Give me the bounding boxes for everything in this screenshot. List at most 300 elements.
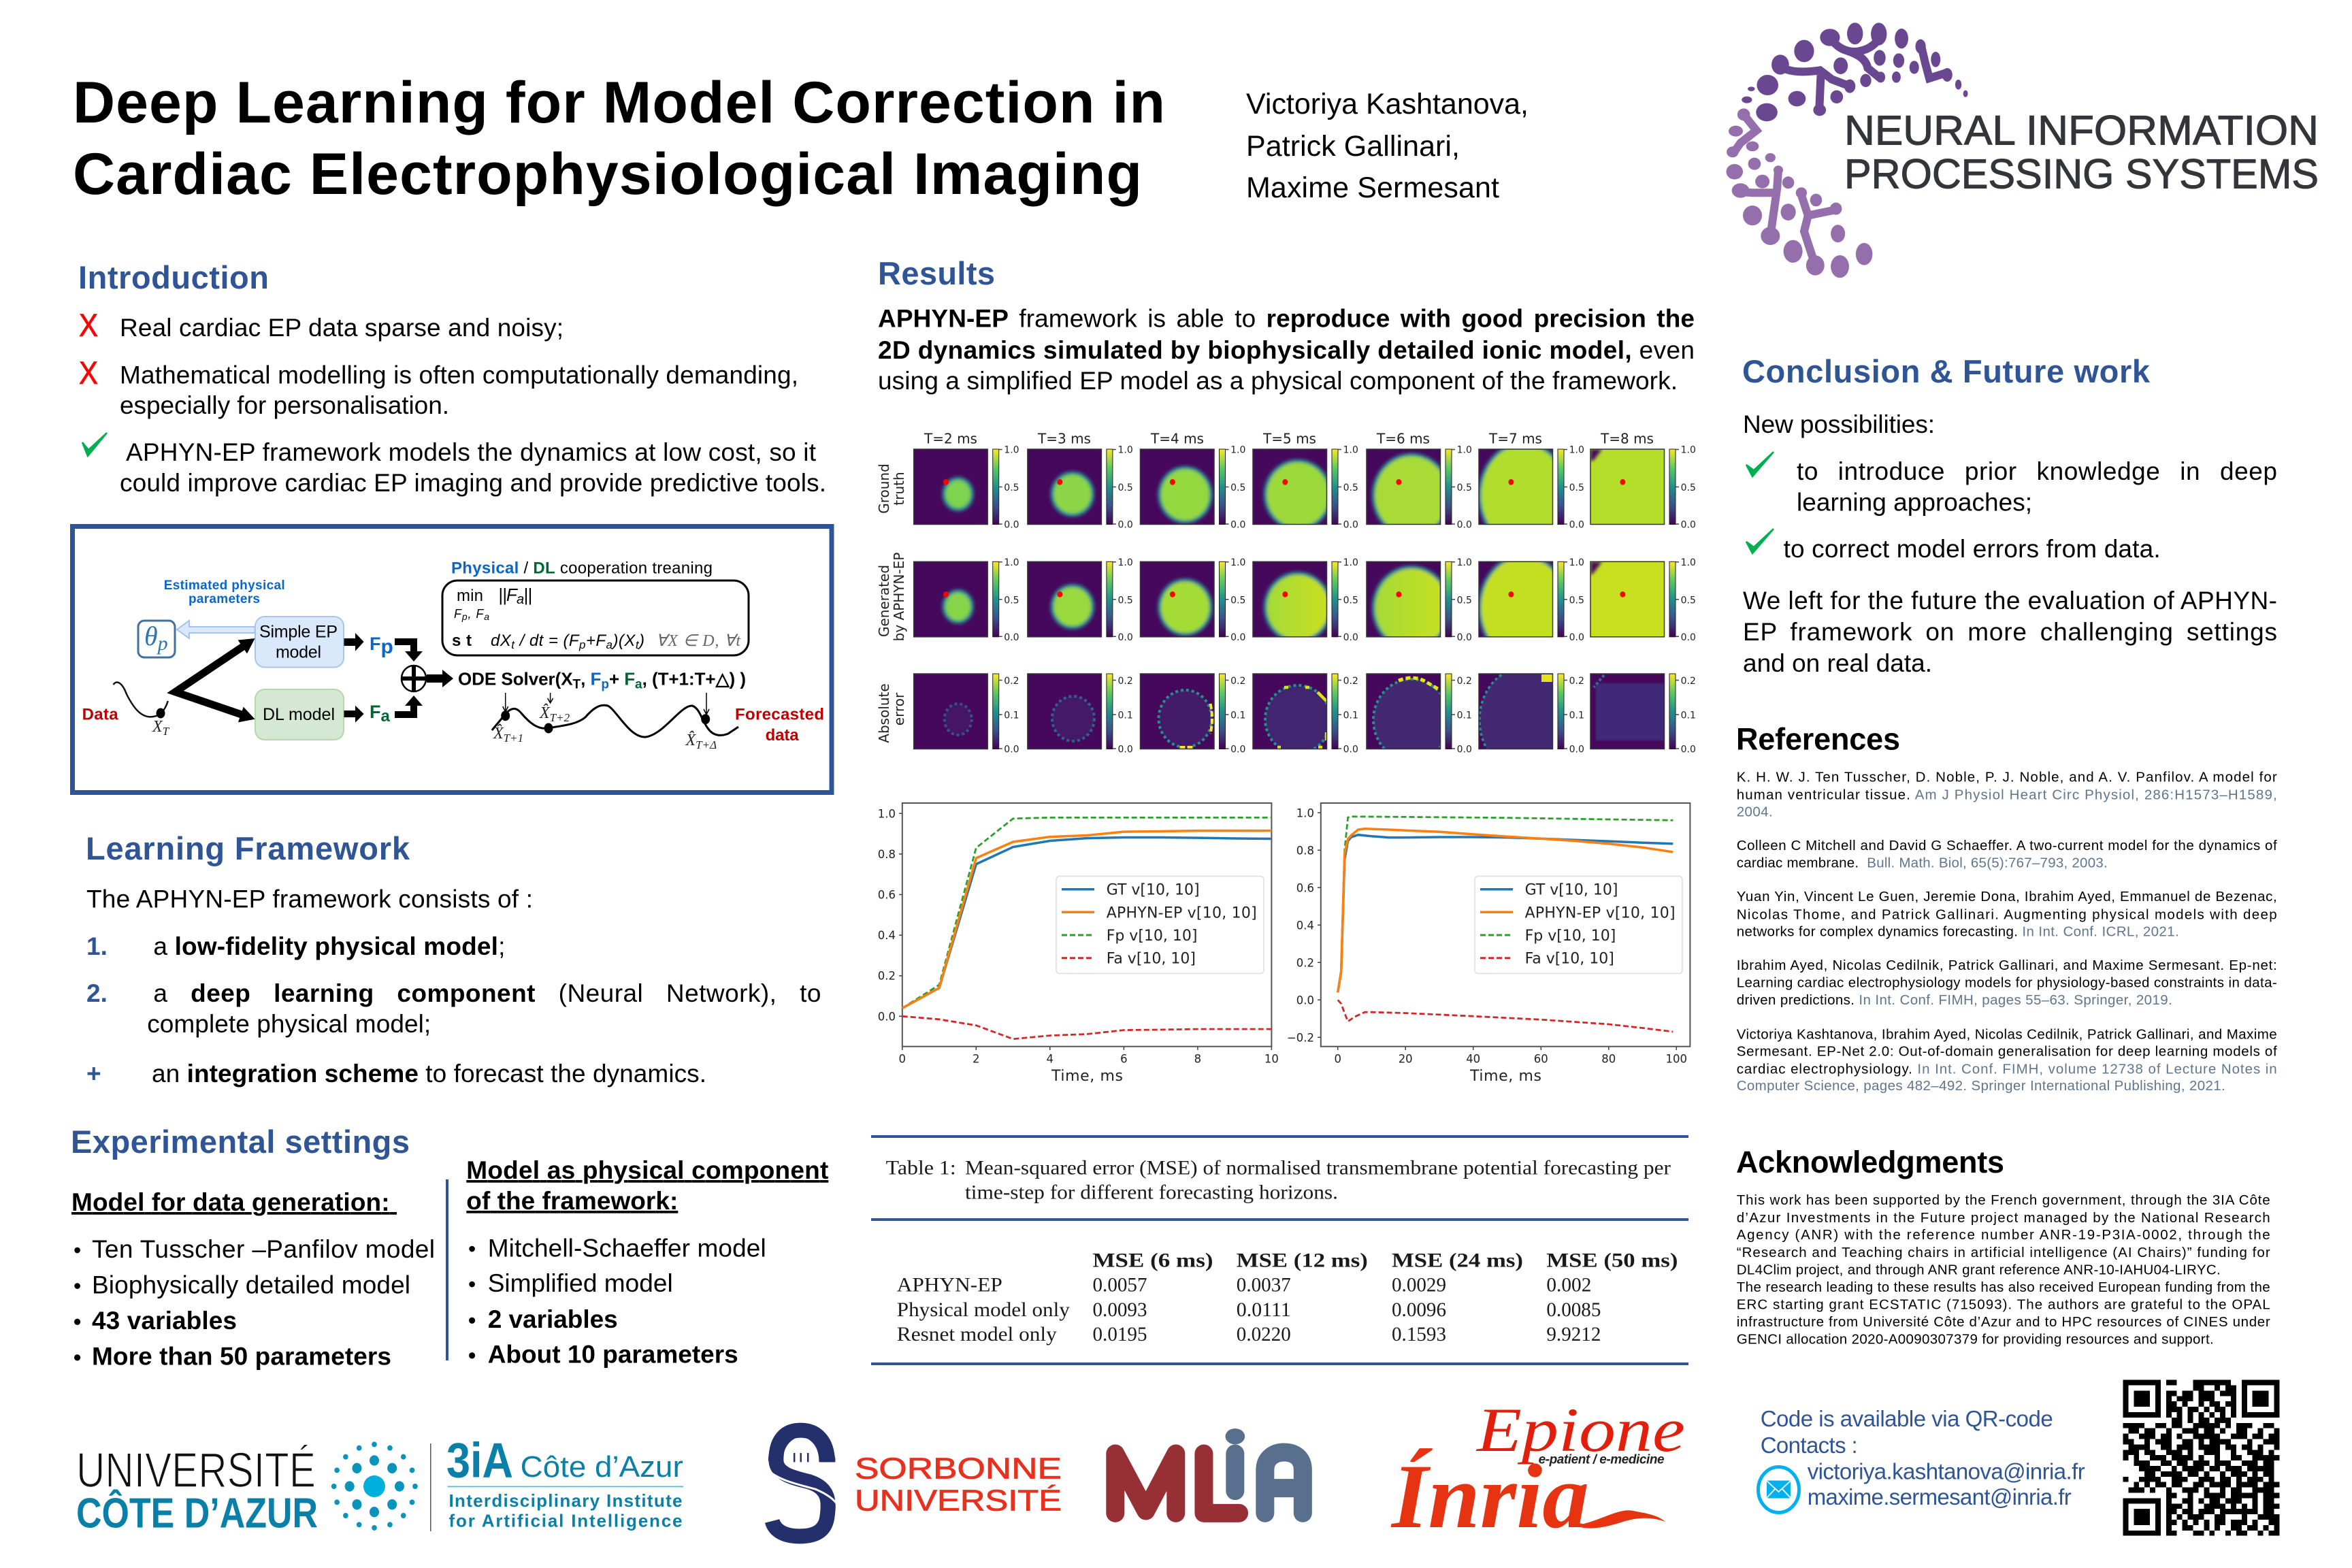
box: simple EP model: Simple EP (259, 623, 338, 642)
axis labels: 8 (1194, 1053, 1201, 1066)
axis labels: 60 (1534, 1053, 1548, 1066)
box: optimisation problem: p (461, 611, 468, 622)
text: results summary: using a simplified EP model as a physical component of the framework. (878, 367, 1678, 395)
logo: 3IA: Côte d’Azur (521, 1450, 683, 1484)
text: future evaluation (1743, 587, 2277, 677)
column titles: T=5 ms (1262, 431, 1316, 447)
axis labels: 4 (1047, 1053, 1054, 1066)
text: results summary: APHYN-EP framework is able to reproduce with good precision the (878, 305, 1695, 332)
column: data generation model: 43 variables (92, 1307, 237, 1335)
chart: data curve: T (163, 725, 170, 738)
heatmap row: absolute error: 0.1 (1004, 710, 1019, 721)
reference 5 (1737, 1026, 2277, 1094)
tagline: e-patient / e-medicine (1539, 1453, 1665, 1467)
heatmap row: generated: 1.0 (1118, 557, 1133, 568)
heatmap row: absolute error: 0.1 (1343, 710, 1358, 721)
heading: conclusion: Conclusion & Future work (1742, 353, 2151, 389)
chart: forecast curve: T+Δ (696, 738, 717, 751)
title (73, 70, 1165, 207)
text: APHYN-EP summary: APHYN-EP framework models the dynamics at low cost, so it (126, 438, 817, 466)
heatmap row: generated: 1.0 (1004, 557, 1019, 568)
heatmap row: absolute error: 0.0 (1681, 745, 1696, 755)
heatmap row: generated: 0.0 (1457, 632, 1472, 643)
icon: neural dots top (1742, 22, 1968, 121)
line: Fa (1338, 1000, 1673, 1032)
reference 3: Yuan Yin, Vincent Le Guen, Jeremie Dona, Ibrahim Ayed, Emmanuel de Bezenac, (1737, 889, 2277, 904)
list item 1: a low-fidelity physical model; (153, 932, 505, 960)
axis labels: 80 (1601, 1053, 1616, 1066)
heatmap row: generated: 0.5 (1230, 595, 1245, 606)
contact block (1759, 1406, 2085, 1512)
axis labels: 0 (1334, 1053, 1341, 1066)
table row: resnet model only: 9.9212 (1546, 1323, 1601, 1345)
heatmap row: ground truth: 0.0 (1569, 520, 1584, 531)
box: optimisation problem (442, 581, 749, 655)
authors (1246, 88, 1529, 204)
reference 2 (1737, 838, 2277, 870)
chart: data curve: X (152, 718, 163, 736)
axis labels: 0 (899, 1053, 906, 1066)
heatmap row: ground truth: 1.0 (1569, 445, 1584, 456)
row label: absolute error: Absolute (876, 683, 892, 743)
panel: references (1736, 722, 2277, 1094)
table header (1093, 1250, 1678, 1272)
text: mathematical modelling: Mathematical modelling is often computationally demanding, (120, 361, 798, 389)
list item 2: a deep learning component (Neural Network), to (153, 979, 821, 1007)
box: simple EP model: model (276, 643, 321, 662)
table row: resnet model only (897, 1323, 1601, 1345)
text: ODE solver: T (573, 678, 581, 692)
logo: Neural Information Processing Systems (1726, 22, 2319, 278)
heatmap row: absolute error: 0.1 (1230, 710, 1245, 721)
box: optimisation problem: +F (586, 632, 606, 650)
heatmap row: generated: 1.0 (1681, 557, 1696, 568)
wordmark: CÔTE D’AZUR (76, 1490, 318, 1537)
table row: physical model only: Physical model only (897, 1298, 1070, 1321)
axis labels: 100 (1666, 1053, 1687, 1066)
text: ODE solver: F (624, 669, 635, 689)
table caption: Table 1: (886, 1157, 956, 1179)
authors: Patrick Gallinari, (1246, 130, 1460, 163)
heatmap row: absolute error: 0.2 (1457, 676, 1472, 687)
axis labels: 0.8 (878, 848, 896, 861)
axis labels: 0.4 (1296, 919, 1314, 932)
heatmap row: generated: 0.0 (1343, 632, 1358, 643)
legend: APHYN-EP v[10, 10] (1525, 904, 1676, 921)
row label: generated: by APHYN-EP (891, 553, 907, 641)
box: optimisation problem: , F (468, 607, 484, 621)
heatmap row: absolute error: 0.0 (1457, 745, 1472, 755)
axis labels: 0.0 (878, 1010, 896, 1023)
heatmap row: absolute error: 0.1 (1569, 710, 1584, 721)
heading: introduction: Introduction (78, 259, 269, 295)
icon: green check 1 (1746, 452, 1774, 476)
heatmap row: absolute error: 0.2 (1569, 676, 1584, 687)
row label: generated: Generated (876, 565, 892, 637)
line: Fa (902, 1016, 1271, 1039)
box: DL model (255, 689, 344, 740)
text: emails: maxime.sermesant@inria.fr (1808, 1484, 2072, 1509)
box: optimisation problem: ∀X ∈ D, ∀t (656, 632, 741, 650)
label: forecasted data (735, 706, 824, 745)
chart: forecast curve (492, 693, 738, 751)
axis labels: 20 (1399, 1053, 1413, 1066)
box: theta p: θ (144, 621, 158, 651)
box: optimisation problem: a (484, 611, 489, 622)
heatmap row: absolute error: 0.1 (1681, 710, 1696, 721)
heatmap row: generated: 0.0 (1118, 632, 1133, 643)
icon: radial dots (331, 1441, 418, 1531)
chart: forecast curve: X̂ (493, 725, 504, 742)
heatmap row: ground truth: 0.5 (1457, 483, 1472, 493)
axis labels: 0.6 (878, 889, 896, 901)
table row: APHYN-EP: 0.002 (1546, 1274, 1591, 1296)
table row: resnet model only: Resnet model only (897, 1323, 1057, 1345)
heading: references: References (1736, 722, 1900, 757)
text: ODE solver: F (590, 669, 601, 689)
axis labels (1287, 806, 1687, 1085)
text: acknowledgments body: DL4Clim project, and through ANR grant reference ANR-10-IAHU04-LIRYC. (1737, 1262, 2221, 1278)
wordmark: UNIVERSITÉ (855, 1484, 1062, 1517)
reference 4: driven predictions. In Int. Conf. FIMH, pages 55–63. Springer, 2019. (1737, 992, 2172, 1008)
heatmap row: absolute error (914, 668, 1696, 772)
legend (1056, 877, 1264, 973)
row label: absolute error (876, 683, 907, 743)
column: physical component model (466, 1156, 828, 1368)
table row: physical model only: 0.0111 (1237, 1298, 1291, 1321)
text: prior knowledge: to introduce prior knowledge in deep (1797, 457, 2277, 485)
heatmap row: generated: 1.0 (1457, 557, 1472, 568)
logo wordmark: PROCESSING SYSTEMS (1844, 151, 2319, 197)
column titles: T=7 ms (1488, 431, 1542, 447)
heatmap row: absolute error: 0.0 (1569, 745, 1584, 755)
table row: physical model only: 0.0096 (1392, 1298, 1446, 1321)
panel: framework diagram (72, 527, 832, 792)
text: ODE solver: p (601, 678, 609, 692)
label: Fa: F (370, 702, 381, 722)
wordmark (855, 1452, 1062, 1517)
axis labels: 2 (973, 1053, 980, 1066)
logo: MLIA (1115, 1428, 1303, 1513)
reference 1: K. H. W. J. Ten Tusscher, D. Noble, P. J. Noble, and A. V. Panfilov. A model for (1737, 770, 2277, 785)
label: forecasted data: data (766, 726, 799, 745)
wordmark: Epione: Epione (1475, 1395, 1685, 1465)
box: optimisation problem: s t (452, 632, 472, 650)
legend: GT v[10, 10] (1525, 882, 1618, 899)
heatmap row: generated: 0.5 (1118, 595, 1133, 606)
authors: Victoriya Kashtanova, (1246, 88, 1529, 120)
line: APHYN-EP (1338, 829, 1673, 992)
text: results summary (878, 305, 1695, 395)
text: results summary: 2D dynamics simulated by biophysically detailed ionic model, even (878, 336, 1695, 364)
list item 1: 1. (86, 932, 108, 960)
line: GT (902, 837, 1271, 1008)
legend: Fa v[10, 10] (1107, 951, 1196, 968)
label: forecasted data: Forecasted (735, 706, 824, 724)
box: optimisation problem: )(X (610, 632, 636, 650)
text: acknowledgments body: infrastructure from Université Côte d’Azur and to HPC resources of CINES under (1737, 1314, 2270, 1330)
heatmap row: ground truth: 0.5 (1004, 483, 1019, 493)
icon: red cross 2: X (79, 355, 98, 391)
text: ODE solver: a (635, 678, 642, 692)
heatmap row: generated: 1.0 (1569, 557, 1584, 568)
column titles: T=3 ms (1037, 431, 1091, 447)
column: data generation model: Ten Tusscher –Panfilov model (92, 1235, 435, 1263)
box: optimisation problem: F (454, 607, 461, 621)
heatmap row: ground truth: 1.0 (1230, 445, 1245, 456)
arrow: model to Fp (344, 633, 364, 651)
heatmap row: absolute error: 0.2 (1343, 676, 1358, 687)
box: optimisation problem: min (457, 587, 483, 605)
box: DL model: DL model (263, 705, 335, 724)
panel: acknowledgments (1736, 1145, 2270, 1348)
axis labels: 1.0 (878, 807, 896, 820)
heatmap row: ground truth: 0.0 (1004, 520, 1019, 531)
reference 3 (1737, 889, 2277, 939)
text: code availability: Code is available via QR-code (1761, 1406, 2053, 1431)
text: future evaluation: EP framework on more challenging settings (1743, 618, 2277, 646)
table header: MSE (12 ms) (1237, 1250, 1368, 1272)
heatmap row: ground truth: 1.0 (1343, 445, 1358, 456)
table header: MSE (50 ms) (1546, 1250, 1678, 1272)
heatmap row: absolute error: 0.2 (1230, 676, 1245, 687)
heatmap row: absolute error: 0.2 (1118, 676, 1133, 687)
panel: conclusion and future work (1742, 353, 2277, 677)
text: ODE solver: , (581, 669, 591, 689)
diagram frame (72, 527, 832, 792)
label: estimated physical parameters (164, 578, 285, 606)
heatmap row: absolute error: 0.0 (1118, 745, 1133, 755)
table row: resnet model only: 0.0220 (1237, 1323, 1291, 1345)
column: physical component model: Model as physical component (466, 1156, 828, 1184)
text: APHYN-EP summary: could improve cardiac EP imaging and provide predictive tools. (120, 469, 826, 497)
wordmark (76, 1443, 318, 1537)
box: optimisation problem: ) (637, 632, 644, 650)
column: data generation model: Model for data generation: (71, 1188, 397, 1216)
logo wordmark: NEURAL INFORMATION (1844, 108, 2319, 154)
arrow: sum to ODE solver (427, 670, 453, 687)
arrow: hollow to theta (177, 621, 255, 638)
heatmap row: ground truth (914, 443, 1696, 548)
table header: MSE (6 ms) (1093, 1250, 1213, 1272)
axis labels: 40 (1466, 1053, 1480, 1066)
text: ODE solver: + (609, 669, 624, 689)
reference 1 (1737, 770, 2277, 819)
text: mathematical modelling (120, 361, 798, 419)
heatmap row: absolute error: 0.2 (1004, 676, 1019, 687)
column: physical component model: About 10 parameters (488, 1341, 738, 1368)
line: Fp (902, 817, 1271, 1008)
heading: acknowledgments: Acknowledgments (1736, 1145, 2004, 1179)
text: prior knowledge (1797, 457, 2277, 516)
box: optimisation problem: t (511, 638, 515, 651)
heatmap row: generated: 0.5 (1004, 595, 1019, 606)
chart: data curve (113, 682, 170, 738)
heatmap row: ground truth: 0.5 (1118, 483, 1133, 493)
text: ODE solver: ODE Solver(X (458, 669, 573, 689)
arrow: Fa to sum (395, 696, 423, 715)
heatmap row: generated: 0.0 (1230, 632, 1245, 643)
logo: 3IA: 3iA (446, 1434, 513, 1488)
axis labels: 0.0 (1296, 994, 1314, 1007)
logo: 3IA (446, 1434, 683, 1531)
heatmap row: generated: 0.5 (1681, 595, 1696, 606)
axis labels: 0.6 (1296, 881, 1314, 894)
text: new possibilities: New possibilities: (1743, 410, 1935, 438)
heatmap row: absolute error: 0.2 (1681, 676, 1696, 687)
text: acknowledgments body: “Research and Teaching chairs in artificial intelligence (AI Chairs)” funding for (1737, 1245, 2270, 1260)
table caption: time-step for different forecasting horizons. (965, 1181, 1338, 1204)
title: Deep Learning for Model Correction in (73, 70, 1165, 135)
heading: learning framework: Learning Framework (86, 830, 410, 866)
heatmap row: ground truth: 1.0 (1118, 445, 1133, 456)
column titles: T=8 ms (1600, 431, 1654, 447)
heatmap row: ground truth: 1.0 (1681, 445, 1696, 456)
icon: red cross 1: X (79, 307, 98, 343)
logo: Epione Inria (1390, 1395, 1685, 1548)
list item 3: an integration scheme to forecast the dynamics. (152, 1060, 706, 1088)
box: optimisation problem: || (523, 585, 532, 605)
legend: Fa v[10, 10] (1525, 951, 1614, 968)
logo: Université Côte d'Azur (76, 1434, 683, 1537)
column: data generation model: More than 50 parameters (92, 1342, 391, 1370)
chart: forecast curve: T+2 (550, 711, 570, 724)
text: correct model errors: to correct model errors from data. (1784, 535, 2161, 563)
row label: generated (876, 553, 907, 641)
column: data generation model: • (74, 1345, 81, 1369)
icon: QR code (2123, 1380, 2279, 1536)
legend: GT v[10, 10] (1107, 882, 1200, 899)
reference 1: human ventricular tissue. Am J Physiol Heart Circ Physiol, 286:H1573–H1589, (1737, 787, 2277, 802)
column: physical component model: Simplified model (488, 1269, 673, 1297)
text: future evaluation: and on real data. (1743, 649, 1932, 677)
table row: APHYN-EP: 0.0029 (1392, 1274, 1446, 1296)
table row: physical model only (897, 1298, 1601, 1321)
logo wordmark (1844, 108, 2319, 197)
table row: physical model only: 0.0093 (1093, 1298, 1147, 1321)
axis labels (878, 807, 1279, 1085)
heatmap row: generated: 0.5 (1569, 595, 1584, 606)
label: Fp: p (381, 636, 393, 658)
legend: Fp v[10, 10] (1107, 928, 1197, 945)
chart: long horizon line chart (1287, 803, 1690, 1085)
box: optimisation problem: / dt = (F (514, 632, 580, 650)
logo: Sorbonne Université (767, 1427, 1062, 1536)
text: ODE solver: , (T+1:T+△) ) (642, 669, 746, 689)
list item 3: + (86, 1060, 101, 1088)
column: data generation model: • (74, 1309, 81, 1334)
icon: Inria swoosh (1580, 1510, 1665, 1529)
column: physical component model: • (468, 1237, 476, 1261)
text: future evaluation: We left for the future the evaluation of APHYN- (1743, 587, 2277, 615)
heatmap row: ground truth: 0.0 (1230, 520, 1245, 531)
arrow: model to Fa (344, 706, 364, 723)
row label: ground truth: Ground (876, 463, 892, 514)
heatmap row: absolute error: 0.1 (1457, 710, 1472, 721)
column: physical component model: • (468, 1343, 476, 1368)
label: Fp: F (370, 634, 381, 654)
heatmap row: absolute error: 0.1 (1118, 710, 1133, 721)
panel: results (878, 255, 1695, 395)
arrows: data to models (176, 638, 255, 722)
box: simple EP model (255, 617, 344, 667)
heading: results: Results (878, 255, 995, 291)
axis labels: 0.4 (878, 929, 896, 942)
axis labels: 1.0 (1296, 806, 1314, 819)
panel: experimental settings (71, 1124, 828, 1370)
box: optimisation problem: a (606, 638, 612, 651)
row label: ground truth (876, 463, 907, 514)
heatmap row: ground truth: 0.5 (1569, 483, 1584, 493)
reference 5: Victoriya Kashtanova, Ibrahim Ayed, Nicolas Cedilnik, Patrick Gallinari, and Maxime (1737, 1026, 2277, 1043)
table row: resnet model only: 0.1593 (1392, 1323, 1446, 1345)
box: optimisation problem: dX (491, 632, 511, 650)
heading: cooperation training: Physical / DL cooperation treaning (451, 559, 713, 578)
line: Fp (1338, 817, 1673, 992)
table row: resnet model only: 0.0195 (1093, 1323, 1147, 1345)
heatmap row: generated (914, 555, 1696, 660)
axis labels: 0.2 (1296, 956, 1314, 969)
text: acknowledgments body: The research leading to these results has also received European funding from the (1737, 1279, 2270, 1295)
reference 1: 2004. (1737, 804, 1773, 819)
column titles (924, 431, 1654, 447)
heatmap row: ground truth: 0.0 (1118, 520, 1133, 531)
table row: APHYN-EP: 0.0057 (1093, 1274, 1147, 1296)
icon: mail (1759, 1467, 1799, 1512)
chart: forecast curve: T+1 (504, 732, 523, 745)
text: prior knowledge: learning approaches; (1797, 489, 2032, 516)
table row: APHYN-EP: APHYN-EP (897, 1274, 1002, 1296)
heatmap row: generated: 1.0 (1230, 557, 1245, 568)
chart: forecast curve: X̂ (540, 704, 550, 722)
box: optimisation problem: a (517, 592, 524, 607)
text: acknowledgments body (1737, 1192, 2270, 1348)
list item 2 (86, 979, 821, 1038)
column titles: T=4 ms (1150, 431, 1204, 447)
chart: forecast curve: X̂ (686, 732, 696, 749)
text: emails: victoriya.kashtanova@inria.fr (1808, 1458, 2085, 1484)
heatmap row: ground truth: 0.0 (1343, 520, 1358, 531)
heatmap row: ground truth: 1.0 (1457, 445, 1472, 456)
table row: APHYN-EP (897, 1274, 1591, 1296)
heatmap row: generated: 0.5 (1343, 595, 1358, 606)
heatmap row: ground truth: 0.5 (1343, 483, 1358, 493)
reference 2: cardiac membrane. Bull. Math. Biol, 65(5):767–793, 2003. (1737, 855, 2108, 870)
heatmap row: ground truth: 0.0 (1457, 520, 1472, 531)
text: acknowledgments body: d’Azur Investments in the Future project managed by the National Research (1737, 1210, 2270, 1226)
heatmap row: ground truth: 1.0 (1004, 445, 1019, 456)
axis labels: 10 (1264, 1053, 1279, 1066)
heatmap row: generated: 0.0 (1004, 632, 1019, 643)
table caption (886, 1157, 1671, 1204)
panel: learning framework (86, 830, 821, 1088)
line: APHYN-EP (902, 831, 1271, 1008)
reference 4: Ibrahim Ayed, Nicolas Cedilnik, Patrick Gallinari, and Maxime Sermesant. Ep-net: (1737, 958, 2277, 973)
heatmap row: generated: 1.0 (1343, 557, 1358, 568)
axis labels: Time, ms (1469, 1068, 1541, 1085)
legend (1475, 877, 1682, 973)
box: theta p: p (157, 632, 168, 655)
icon: neural dots bottom (1726, 108, 1872, 278)
text: framework intro: The APHYN-EP framework consists of : (86, 885, 533, 913)
logo: 3IA: Interdisciplinary Institute (449, 1490, 682, 1511)
chart: short horizon line chart (878, 803, 1279, 1085)
heatmap row: ground truth: 0.0 (1681, 520, 1696, 531)
chart: heatmaps (876, 431, 1696, 772)
text: sparse data: Real cardiac EP data sparse and noisy; (120, 314, 564, 342)
table caption: Mean-squared error (MSE) of normalised transmembrane potential forecasting per (965, 1157, 1671, 1179)
reference 4: Learning cardiac electrophysiology models for physiology-based constraints in data- (1737, 975, 2277, 990)
